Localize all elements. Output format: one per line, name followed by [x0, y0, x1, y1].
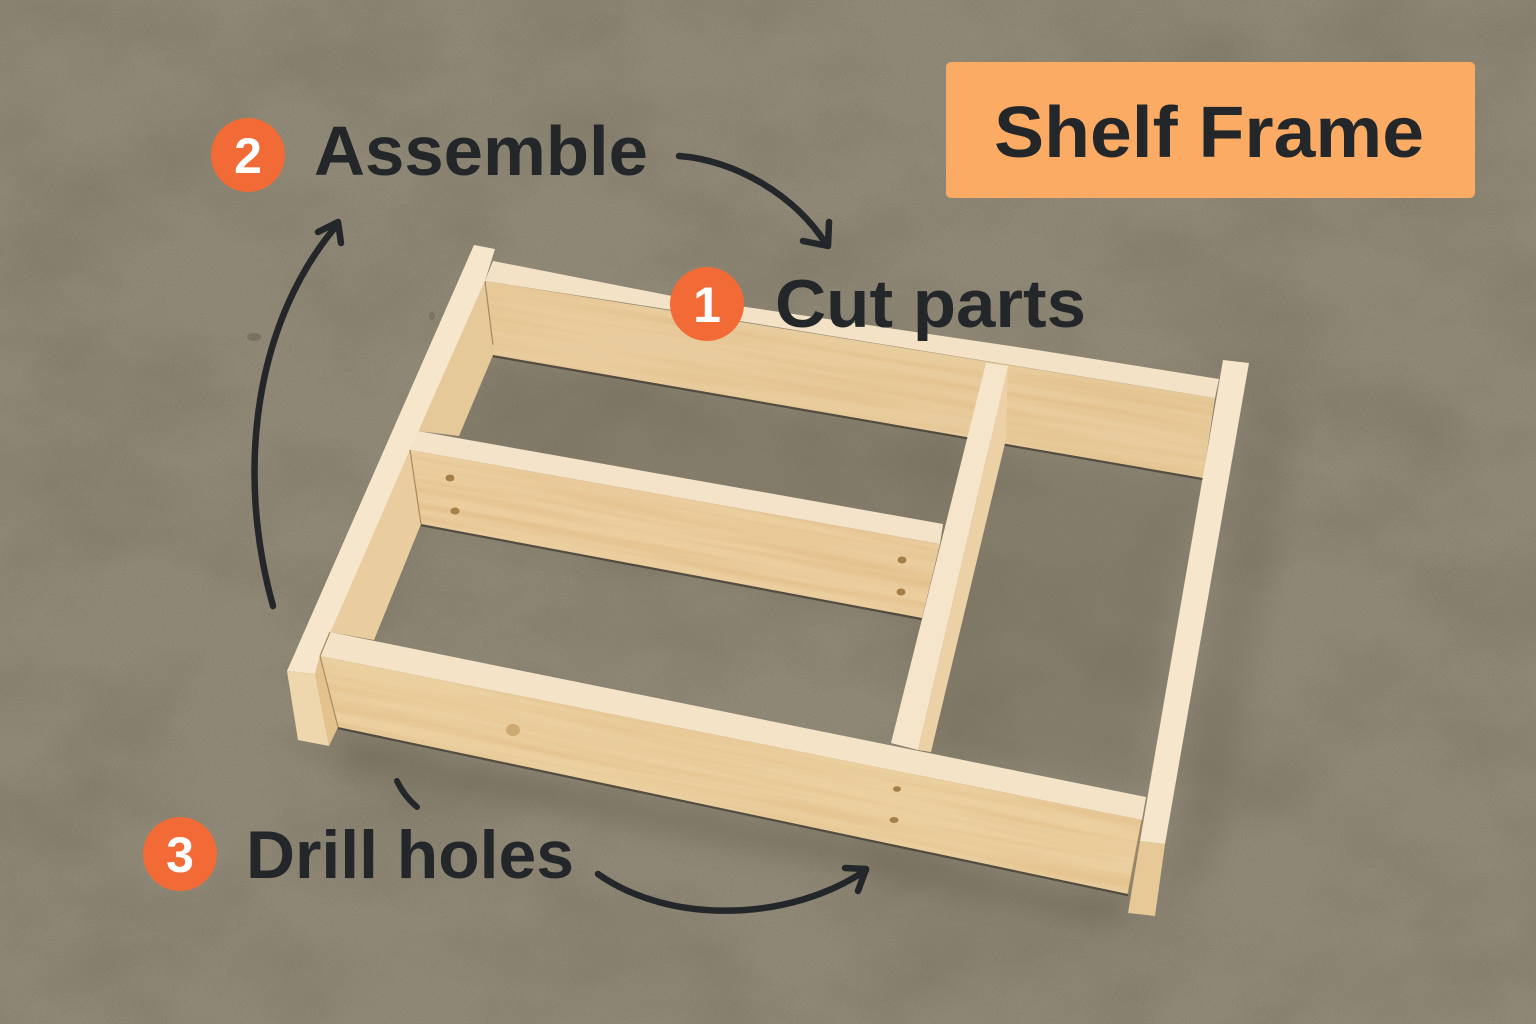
- step 2: Assemble: Assemble: [314, 112, 648, 190]
- step 1: Cut parts: 1: [693, 277, 721, 333]
- middle board: [410, 431, 943, 618]
- title badge: Shelf Frame: [994, 93, 1424, 173]
- wooden shelf frame: [287, 245, 1249, 916]
- step 2: Assemble: 2: [234, 128, 262, 184]
- screw holes: [446, 474, 906, 596]
- back board: [485, 261, 1219, 478]
- wood knot: [506, 724, 520, 736]
- arrow: assemble to cut parts: [679, 156, 829, 246]
- arrow: drill holes to frame: [598, 868, 866, 911]
- front board: [320, 632, 1146, 894]
- left rail: [287, 245, 495, 746]
- step 3: Drill holes: 3: [166, 827, 194, 883]
- short arrow stroke near frame corner: [397, 781, 417, 807]
- title badge: [946, 62, 1475, 198]
- step 1: Cut parts: Cut parts: [775, 266, 1086, 342]
- right rail: [1128, 360, 1249, 916]
- contact shadows: [338, 356, 1203, 895]
- step 3: Drill holes: Drill holes: [246, 817, 574, 893]
- screw holes: [890, 786, 901, 823]
- arrow: drill holes to assemble: [254, 222, 341, 606]
- vertical divider: [891, 363, 1008, 752]
- seams between boards: [320, 281, 1142, 894]
- left rail inner faces: [330, 281, 493, 640]
